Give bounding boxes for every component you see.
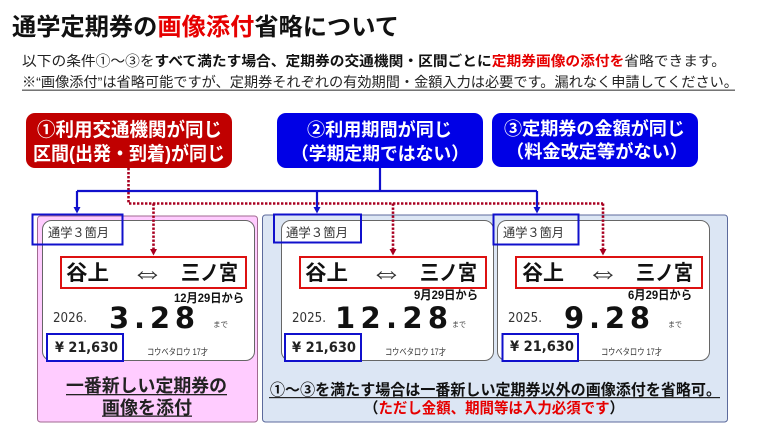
- route box 3: 谷上: [522, 262, 564, 285]
- commute pass label 2: 通学３箇月: [286, 225, 348, 240]
- price box 3: ¥ 21,630: [510, 339, 574, 355]
- price box 1: ¥ 21,630: [55, 340, 118, 356]
- end date 3: 9.28: [564, 301, 650, 335]
- caption: attach latest pass: 画像を添付: [102, 398, 192, 418]
- condition 2 box: ②利用期間が同じ: [307, 119, 452, 140]
- route box 2: 三ノ宮: [420, 262, 477, 285]
- year 3: 2025.: [508, 311, 542, 326]
- start date 3: 6月29日から: [628, 288, 692, 302]
- price box 1: [47, 334, 123, 361]
- title: 通学定期券の画像添付省略について: [12, 14, 399, 41]
- route box 1: 三ノ宮: [181, 262, 238, 285]
- panel: other passes: [262, 215, 728, 422]
- condition 1 box: [26, 113, 232, 168]
- condition 3 box: （料金改定等がない）: [506, 141, 688, 162]
- condition 2 box: [277, 113, 483, 168]
- route box 1: ⇔: [131, 253, 164, 290]
- card 2: [282, 220, 494, 360]
- route box 2: ⇔: [370, 253, 403, 290]
- intro text: [22, 53, 738, 91]
- route box 1: 谷上: [66, 262, 109, 285]
- route box 2: [300, 253, 486, 290]
- intro text: ※“画像添付”は省略可能ですが、定期券それぞれの有効期間・金額入力は必要です。漏れなく申請してください。: [22, 74, 738, 90]
- year 1: 2026.: [53, 311, 87, 326]
- commute pass label 1: 通学３箇月: [48, 225, 109, 240]
- until label 1: まで: [213, 320, 228, 329]
- panel: latest pass: [38, 216, 258, 422]
- route box 3: [516, 253, 702, 290]
- condition 3 box: [492, 113, 698, 167]
- condition 1 box: ①利用交通機関が同じ: [37, 118, 222, 141]
- name 3: コウベタロウ 17才: [601, 346, 662, 357]
- until label 2: まで: [452, 320, 466, 329]
- caption: attach latest pass: [66, 376, 227, 418]
- until label 3: まで: [668, 320, 682, 329]
- card 3: [498, 220, 710, 360]
- year 2: 2025.: [292, 311, 326, 326]
- route box 3: ⇔: [586, 253, 620, 290]
- pass type highlight 3: [494, 214, 578, 244]
- card 1: [42, 220, 254, 360]
- name 1: コウベタロウ 17才: [147, 346, 208, 357]
- start date 2: 9月29日から: [414, 288, 478, 302]
- condition 2 box: （学期定期ではない）: [291, 143, 469, 164]
- commute pass label 3: 通学３箇月: [503, 225, 564, 240]
- caption: conditions met: [269, 380, 721, 417]
- pass type highlight 2: [274, 214, 361, 242]
- end date 2: 12.28: [335, 301, 448, 335]
- route box 3: 三ノ宮: [636, 262, 693, 285]
- price box 2: ¥ 21,630: [292, 340, 356, 356]
- intro text: 以下の条件①～③を すべて満たす場合、定期券の交通機関・区間ごとに 定期券画像の添付を 省略できます。: [22, 53, 726, 69]
- condition 1 box: 区間(出発・到着)が同じ: [33, 142, 225, 165]
- name 2: コウベタロウ 17才: [385, 346, 446, 357]
- end date 1: 3.28: [109, 301, 195, 335]
- price box 2: [285, 334, 361, 361]
- red dotted connector from condition 1: [128, 168, 606, 256]
- route box 1: [61, 253, 246, 290]
- blue connector from condition 2: [74, 168, 540, 214]
- condition 3 box: ③定期券の金額が同じ: [504, 118, 685, 139]
- route box 2: 谷上: [305, 262, 348, 285]
- pass type highlight 1: [32, 214, 122, 244]
- caption: attach latest pass: 一番新しい定期券の: [66, 376, 227, 396]
- start date 1: 12月29日から: [174, 291, 244, 305]
- caption: conditions met: ①～③を満たす場合は一番新しい定期券以外の画像添付を省略可。: [270, 380, 721, 399]
- price box 3: [502, 334, 578, 361]
- caption: conditions met: （ただし金額、期間等は入力必須です）: [364, 399, 624, 417]
